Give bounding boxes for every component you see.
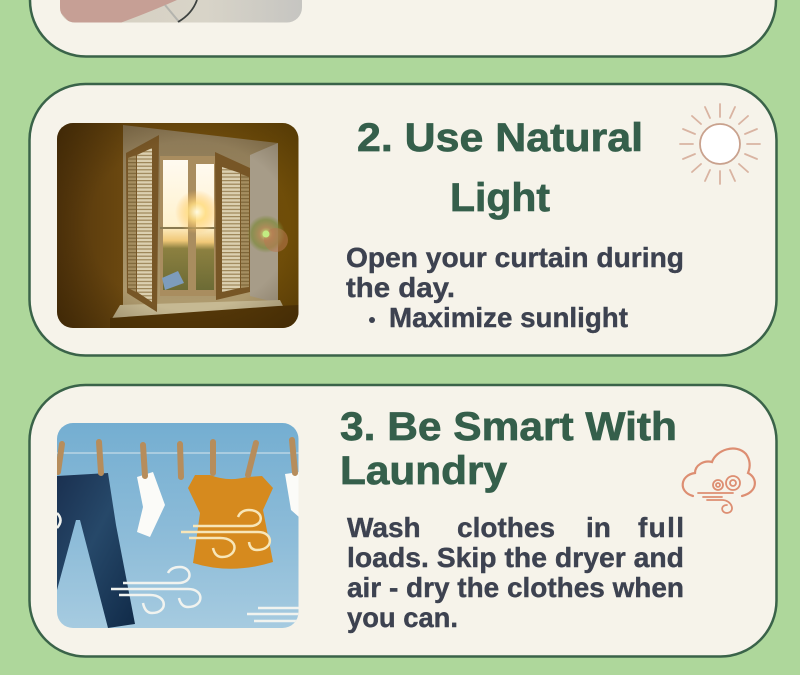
body text: wash clothes: Wash	[347, 512, 421, 543]
photo: clothes on a line with wind	[57, 423, 299, 628]
body text: open your curtain: Maximize sunlight	[389, 302, 628, 333]
wind gusts	[181, 510, 270, 557]
body text: wash clothes: full	[638, 512, 684, 543]
panel: step 1 card (cropped)	[30, 0, 776, 56]
panel: step 3 laundry	[30, 385, 776, 656]
heading: 2. Use Natural Light: Light	[450, 176, 550, 220]
photo: open window at sunset	[57, 123, 299, 328]
pegs	[58, 440, 295, 477]
heading: 2. Use Natural Light: 2. Use Natural	[357, 116, 643, 160]
shirt	[188, 475, 273, 569]
socks	[137, 472, 165, 537]
body text: wash clothes: air - dry the clothes when	[347, 572, 684, 603]
panel: step 2 natural light	[30, 84, 776, 356]
icon: cloud with wind	[683, 449, 755, 513]
body text: wash clothes: loads. Skip the dryer and	[347, 542, 684, 573]
photo: hand holding a cord	[60, 0, 302, 23]
body text: open your curtain	[346, 242, 684, 333]
heading: 3. Be Smart With Laundry	[340, 405, 677, 493]
body text: wash clothes	[347, 512, 684, 633]
body text: open your curtain: the day.	[346, 272, 455, 303]
icon: sun	[680, 104, 760, 184]
heading: 3. Be Smart With Laundry: Laundry	[340, 449, 508, 493]
body text: wash clothes: you can.	[347, 602, 458, 633]
body text: wash clothes: in	[586, 512, 611, 543]
heading: 3. Be Smart With Laundry: 3. Be Smart With	[340, 405, 677, 449]
body text: open your curtain: Open your curtain during	[346, 242, 684, 273]
heading: 2. Use Natural Light	[357, 116, 643, 220]
jeans	[57, 473, 135, 628]
body text: wash clothes: clothes	[457, 512, 555, 543]
